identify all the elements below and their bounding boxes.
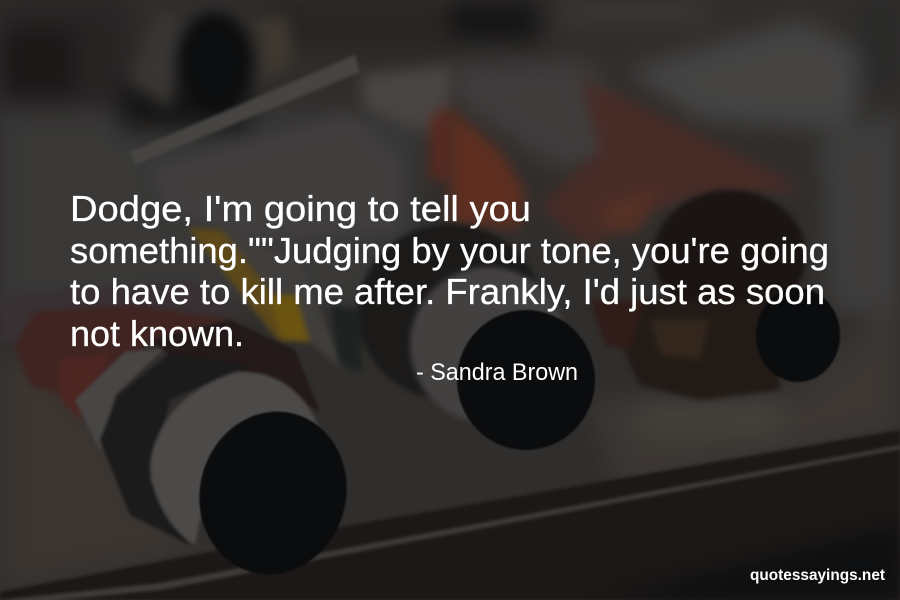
quote text — [70, 188, 829, 354]
left bottle cap: white band — [150, 372, 320, 545]
attribution: - Sandra Brown — [416, 359, 578, 386]
quote text: not known. — [70, 313, 244, 354]
quote text: to have to kill me after. Frankly, I'd just as soon — [70, 271, 825, 312]
red paint left — [0, 280, 250, 420]
centre tube and striped cap side — [330, 224, 566, 423]
quote text: Dodge, I'm going to tell you — [70, 188, 531, 229]
quote text: something.""Judging by your tone, you're going — [70, 230, 829, 271]
upper pale tube — [150, 65, 450, 240]
table edge and floor — [0, 430, 900, 600]
red and orange paint tube — [450, 78, 805, 250]
left bottle cap: black face — [181, 395, 365, 591]
watermark: quotessayings.net — [750, 567, 886, 584]
centre bottle cap: black face — [457, 310, 595, 450]
right bottle cap — [756, 288, 840, 382]
diagonal pale tube — [130, 55, 360, 165]
tube neck and bands — [75, 320, 320, 545]
top left dark cap — [130, 10, 295, 112]
yellow tube — [188, 228, 345, 372]
dark tube on the right — [590, 190, 806, 400]
